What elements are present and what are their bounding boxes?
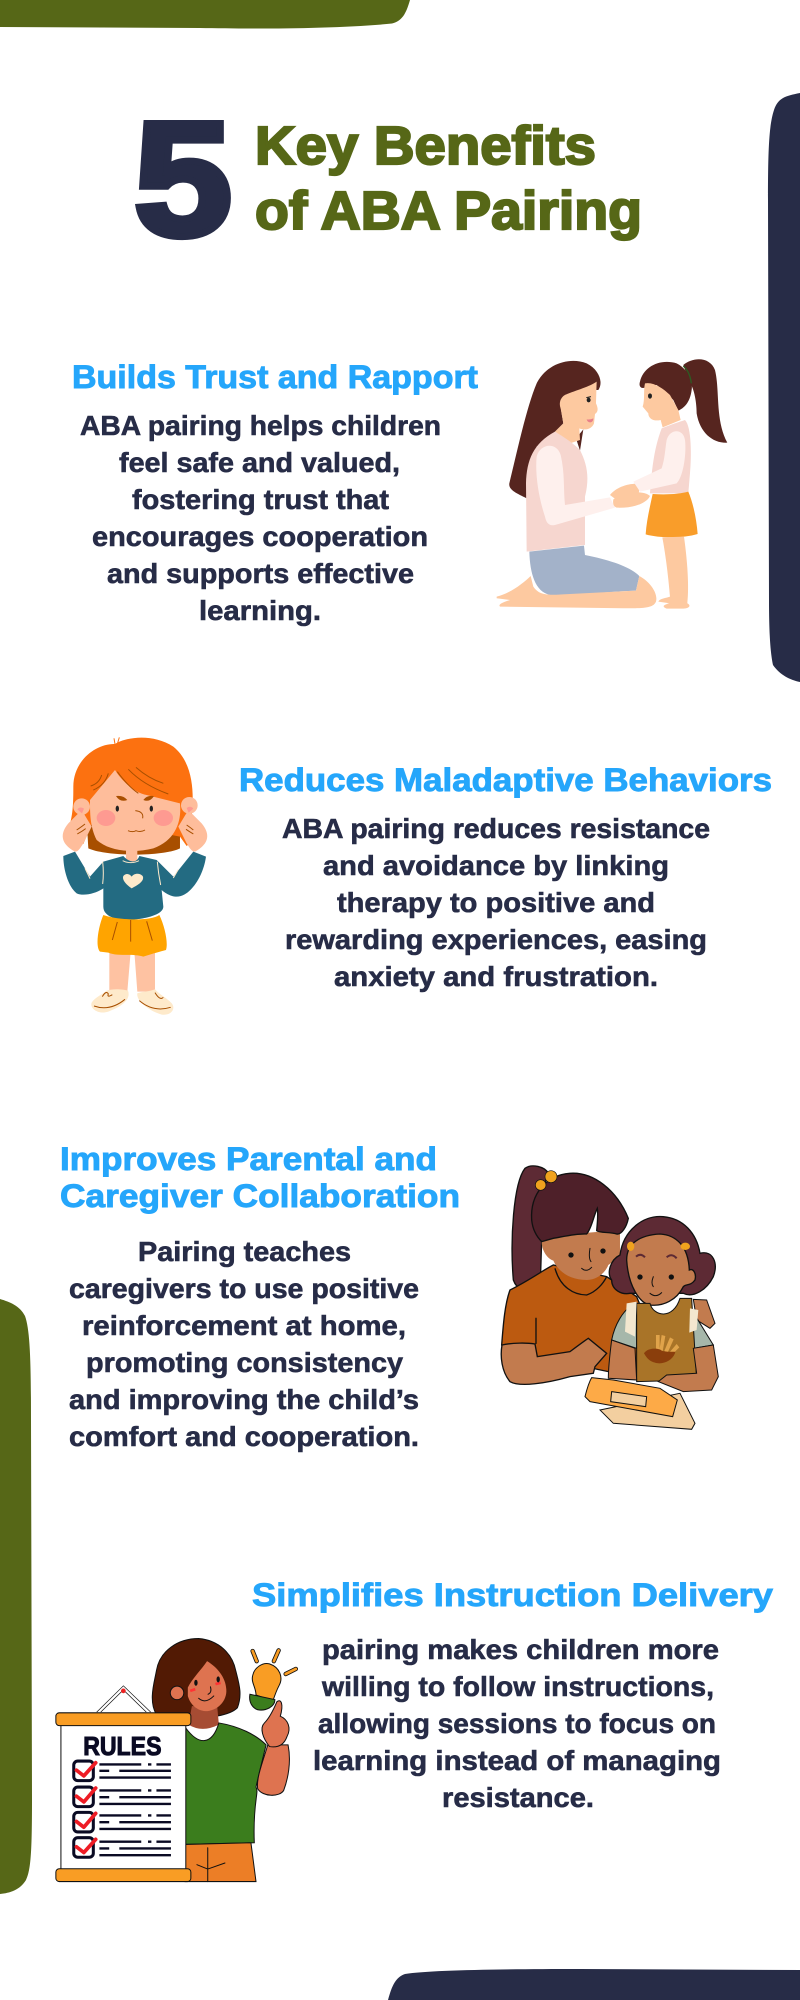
body text xyxy=(282,813,710,992)
body text xyxy=(69,1236,419,1452)
title text: of ABA Pairing xyxy=(255,181,642,241)
arm and hand xyxy=(257,1745,289,1795)
illustration: person pointing beside rules board xyxy=(56,1639,296,1882)
decorative shape: bottom navy bar xyxy=(388,1969,800,2000)
shirt xyxy=(185,1723,266,1844)
body text: promoting consistency xyxy=(86,1347,403,1378)
body text xyxy=(80,410,441,626)
decorative shape: top left green bar xyxy=(0,0,410,29)
neck xyxy=(188,1706,219,1729)
body text: comfort and cooperation. xyxy=(69,1421,419,1452)
body text: learning instead of managing xyxy=(313,1745,721,1776)
pants xyxy=(185,1843,256,1882)
body text: and avoidance by linking xyxy=(323,850,669,881)
body text: Pairing teaches xyxy=(138,1236,351,1267)
body text: ABA pairing reduces resistance xyxy=(282,813,710,844)
body text: reinforcement at home, xyxy=(82,1310,406,1341)
rules board xyxy=(61,1721,186,1873)
body text: resistance. xyxy=(442,1782,594,1813)
hair xyxy=(152,1639,240,1718)
heading: Improves Parental and xyxy=(60,1141,437,1177)
illustration: mother and daughter with tablet xyxy=(501,1166,718,1429)
body text: learning. xyxy=(199,595,321,626)
panel: builds trust and rapport xyxy=(72,359,727,626)
body text: fostering trust that xyxy=(132,484,389,515)
title text: Key Benefits xyxy=(255,116,596,176)
checklist xyxy=(74,1761,93,1857)
body text: pairing makes children more xyxy=(322,1634,719,1665)
body text: caregivers to use positive xyxy=(69,1273,419,1304)
panel: simplifies instruction delivery xyxy=(56,1577,773,1882)
body text: rewarding experiences, easing xyxy=(285,924,707,955)
body text: ABA pairing helps children xyxy=(80,410,441,441)
body text: feel safe and valued, xyxy=(119,447,400,478)
body text: and supports effective xyxy=(107,558,414,589)
heading: Caregiver Collaboration xyxy=(60,1178,460,1214)
title text xyxy=(255,116,642,241)
illustration: woman kneeling holding hands with girl xyxy=(497,359,727,609)
board heading: RULES xyxy=(83,1733,162,1761)
bulb xyxy=(252,1664,281,1701)
body text xyxy=(313,1634,721,1813)
title numeral 5: 5 xyxy=(134,89,232,270)
body text: allowing sessions to focus on xyxy=(318,1708,716,1739)
heading: Simplifies Instruction Delivery xyxy=(252,1577,773,1613)
title xyxy=(134,89,642,270)
panel: improves parental and caregiver collaboration xyxy=(60,1141,718,1452)
hanging string xyxy=(97,1686,151,1712)
body text: and improving the child’s xyxy=(69,1384,419,1415)
body text: willing to follow instructions, xyxy=(321,1671,714,1702)
illustration: upset girl covering ears xyxy=(63,737,207,1015)
heading xyxy=(60,1141,460,1214)
body text: anxiety and frustration. xyxy=(334,961,658,992)
decorative shape: left green bar xyxy=(0,1299,32,1894)
heading: Builds Trust and Rapport xyxy=(72,359,478,395)
heading: Reduces Maladaptive Behaviors xyxy=(239,762,772,798)
decorative shape: right navy bar xyxy=(768,93,800,682)
body text: therapy to positive and xyxy=(337,887,655,918)
face xyxy=(170,1661,226,1711)
body text: encourages cooperation xyxy=(92,521,428,552)
panel: reduces maladaptive behaviors xyxy=(63,737,772,1015)
